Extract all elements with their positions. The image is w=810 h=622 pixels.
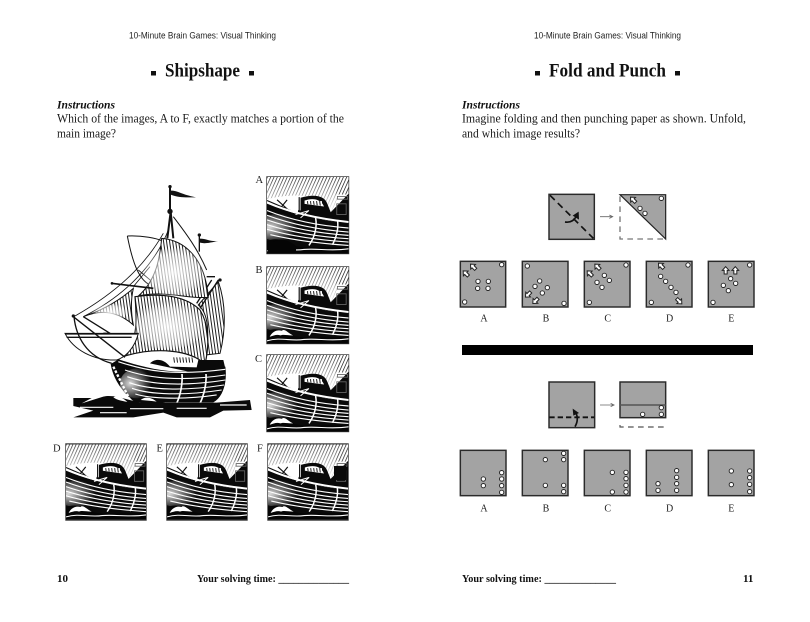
right page footer: Your solving time: ______________ xyxy=(462,573,616,585)
instructions: Fold and Punch: Instructions xyxy=(461,98,520,112)
right page footer xyxy=(462,573,753,585)
option tile C xyxy=(255,354,348,432)
right page running header: 10-Minute Brain Games: Visual Thinking xyxy=(534,30,681,40)
arrow: fold result xyxy=(600,403,614,407)
right page footer: 11 xyxy=(743,573,753,585)
title: Shipshape: Shipshape xyxy=(165,62,240,82)
arrow: fold result xyxy=(600,215,613,218)
left page footer: Your solving time: ______________ xyxy=(197,573,349,585)
fold diagram: square with dashed line xyxy=(549,382,595,428)
illustration: sailing ship xyxy=(65,185,252,417)
answer option E: E xyxy=(728,314,734,325)
answer option E: E xyxy=(728,504,734,515)
instructions: Shipshape: Instructions xyxy=(56,98,115,112)
instructions: Shipshape xyxy=(56,98,344,140)
answer option A xyxy=(460,450,506,515)
folded paper with punches xyxy=(620,382,666,427)
answer option E xyxy=(708,261,754,325)
left page running header: 10-Minute Brain Games: Visual Thinking xyxy=(129,30,276,40)
answer option D: D xyxy=(666,504,673,515)
answer option C: C xyxy=(604,314,611,325)
answer option A xyxy=(460,261,506,325)
instructions: Shipshape: main image? xyxy=(57,126,116,140)
option tile F: F xyxy=(257,444,263,454)
option tile A: A xyxy=(256,175,264,186)
option tile B xyxy=(255,265,348,344)
folded triangle with punches xyxy=(620,195,666,239)
fold diagram: square with dashed diagonal xyxy=(549,194,594,239)
answer option B xyxy=(522,261,568,325)
instructions: Fold and Punch: Imagine folding and then punching paper as shown. Unfold, xyxy=(462,112,746,126)
answer option B: B xyxy=(543,504,550,515)
option tile A xyxy=(255,175,348,254)
left page footer xyxy=(57,573,349,585)
option tile D xyxy=(53,444,146,520)
puzzle 1: diagonal fold xyxy=(460,194,754,325)
divider bar between puzzles xyxy=(462,345,753,355)
instructions: Fold and Punch: and which image results? xyxy=(462,126,580,140)
option tile D: D xyxy=(53,444,61,454)
title: Fold and Punch: Fold and Punch xyxy=(549,62,667,82)
option tile B: B xyxy=(256,265,263,276)
answer option D xyxy=(646,261,692,325)
answer option A: A xyxy=(480,314,488,325)
option tile E xyxy=(155,444,247,520)
answer option E xyxy=(708,450,754,515)
puzzle 2: horizontal fold xyxy=(460,382,754,515)
answer option D: D xyxy=(666,314,673,325)
answer option A: A xyxy=(480,504,488,515)
option tile F xyxy=(256,444,348,520)
instructions: Fold and Punch xyxy=(461,98,746,140)
answer option C xyxy=(584,261,630,325)
instructions: Shipshape: Which of the images, A to F, exactly matches a portion of the xyxy=(57,112,344,126)
answer option C: C xyxy=(604,504,611,515)
left page footer: 10 xyxy=(57,573,68,585)
option tile E: E xyxy=(156,444,163,454)
answer option C xyxy=(584,450,630,515)
answer option B: B xyxy=(543,314,550,325)
answer option B xyxy=(522,450,568,515)
option tile C: C xyxy=(255,354,262,365)
answer option D xyxy=(646,450,692,515)
